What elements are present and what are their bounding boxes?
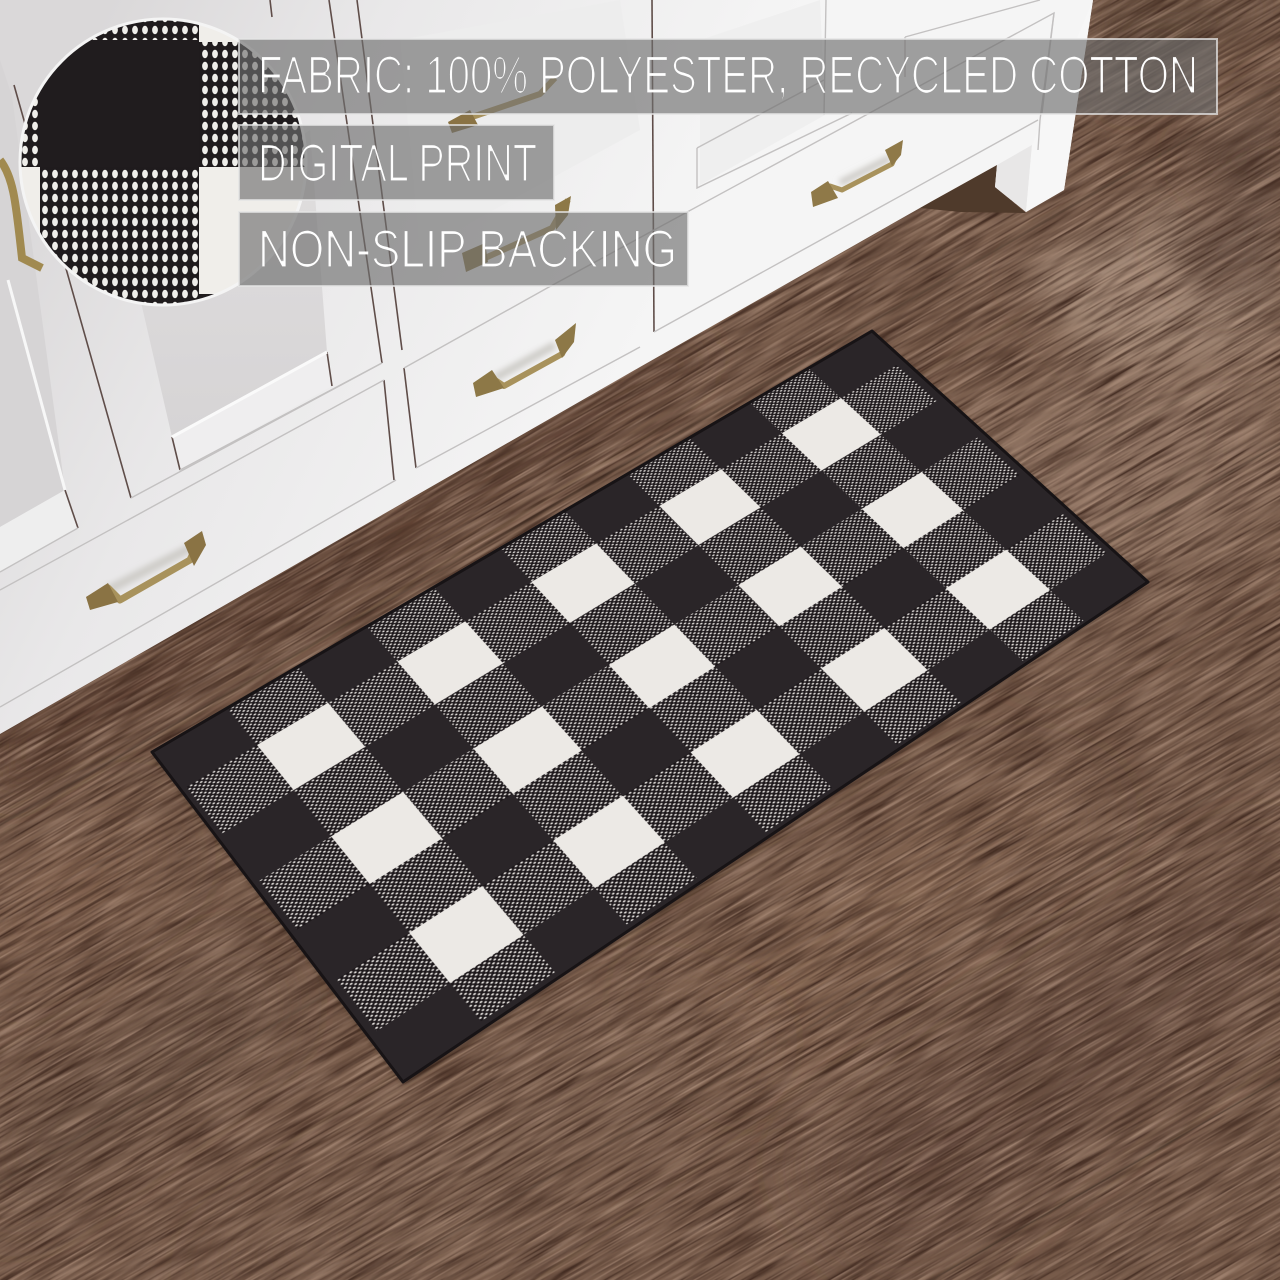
icon: brass handle, far left (0, 160, 42, 268)
upper door recess (400, 0, 640, 250)
rug: buffalo check pattern (186, 366, 1106, 1031)
icon: brass handle, mid drawer (462, 196, 571, 272)
door recess left (0, 60, 65, 527)
label panel: non-slip backing (239, 212, 688, 286)
white squares (257, 398, 1050, 983)
checked bands (158, 337, 1140, 1070)
cabinet body (0, 0, 1093, 734)
rug base shape (152, 331, 1149, 1085)
cabinet seams (14, 0, 654, 528)
shadow beneath cabinet (920, 165, 1026, 213)
cabinet foot (995, 145, 1032, 212)
icon: brass handle, centre drawer (473, 323, 576, 397)
fabric close-up circle (18, 18, 305, 306)
overlay: fabric detail circle and feature labels (18, 18, 1218, 306)
label panel: digital print (239, 125, 554, 200)
label panel: non-slip backing: NON-SLIP BACKING (258, 220, 677, 279)
icon: brass handle, right drawer (811, 140, 903, 207)
label panel: digital print: DIGITAL PRINT (258, 134, 537, 193)
door recess centre (129, 130, 327, 437)
icon: brass handle, lower left drawer (86, 531, 206, 610)
icon: brass handle, upper centre (448, 78, 555, 133)
